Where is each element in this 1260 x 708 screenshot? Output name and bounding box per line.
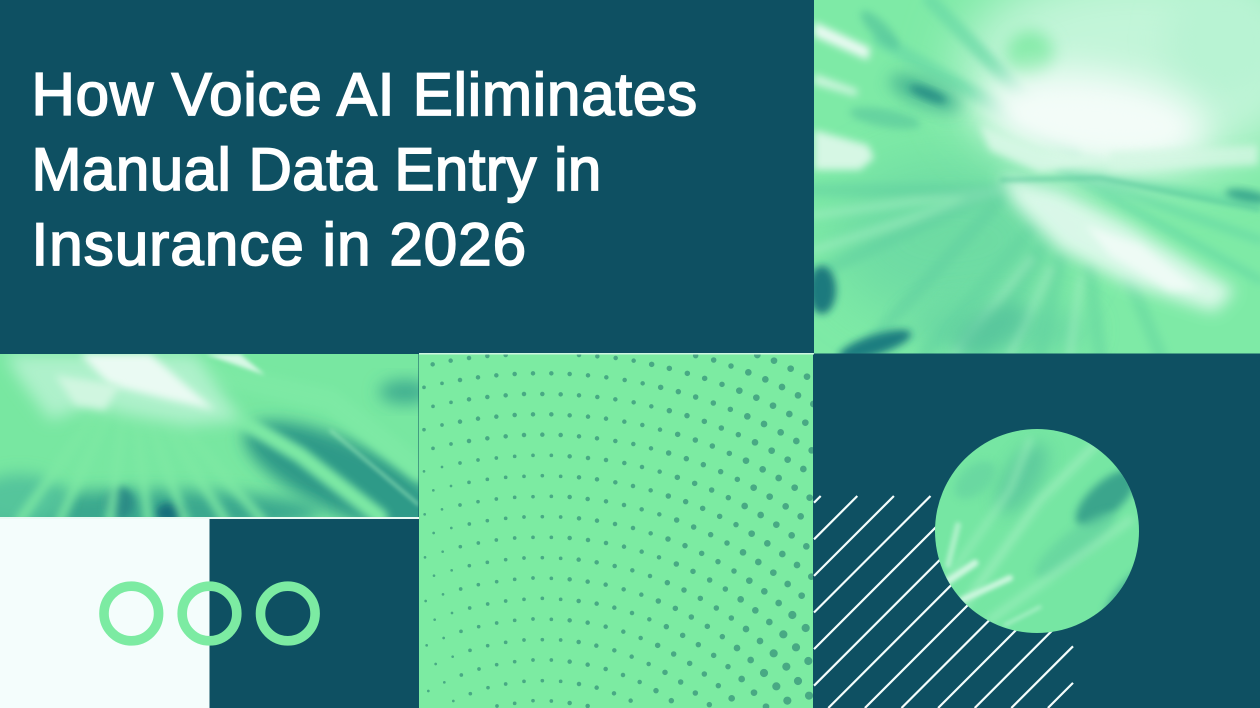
title: How Voice AI Eliminates (32, 61, 698, 128)
panel: bottom-left radial burst image (0, 354, 418, 517)
title: Manual Data Entry in (32, 136, 602, 203)
title: Insurance in 2026 (32, 211, 527, 278)
title (32, 61, 698, 278)
panel: pale lower-left block (0, 519, 210, 708)
panel: lower-right dark block (814, 354, 1260, 708)
panel: dark lower-left block (210, 519, 419, 708)
panel: top-right radial burst image (808, 0, 1260, 366)
circle with green texture (935, 429, 1139, 633)
panel: title background (0, 0, 814, 354)
icon: three green rings (104, 586, 315, 641)
diagonal white stripes (814, 496, 1073, 708)
panel: halftone dots (419, 354, 813, 708)
